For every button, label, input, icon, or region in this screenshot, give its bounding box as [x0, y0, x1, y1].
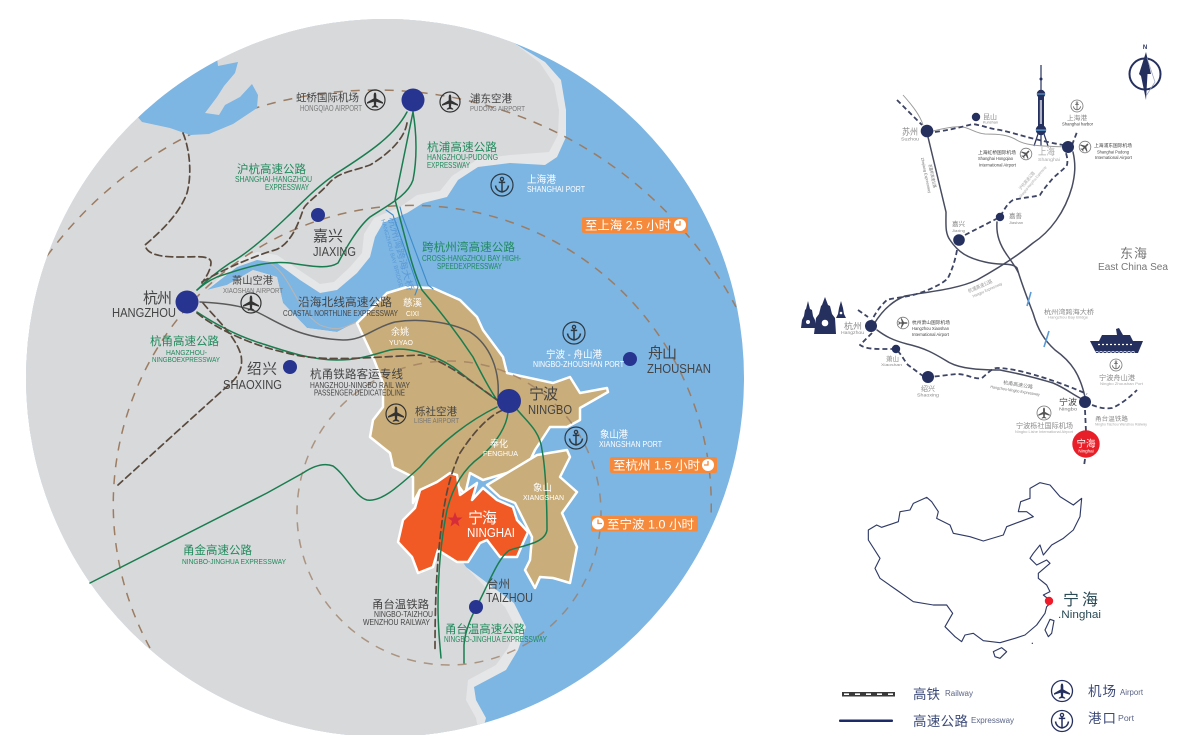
label: Pudong airport: [470, 92, 525, 113]
label: Ningbo: Ningbo: [1059, 406, 1078, 412]
label: Hangzhou-Pudong expressway: [427, 140, 498, 170]
label: Shanghai-Hangzhou expressway: 沪杭高速公路: [1017, 170, 1037, 191]
label: Shanghai-Hangzhou expressway: 沪杭高速公路: [237, 162, 306, 176]
label: Xiaoshan airport: International Airport: [912, 332, 950, 337]
legend: airport: Airport: [1120, 688, 1144, 697]
label: East China Sea: [1098, 246, 1168, 273]
inner distance ring: [297, 361, 601, 665]
icon: ship: [1090, 328, 1143, 353]
label: Shaoxing: Shaoxing: [917, 392, 940, 398]
city node: Ninghai with label: Ninghai: [1078, 448, 1094, 454]
label: Yuyao: [389, 326, 413, 347]
panel: Yangtze delta route map: [801, 45, 1168, 466]
label: Hangzhou Bay Bridge: 杭州湾跨海大桥: [1044, 307, 1095, 316]
label: Shanghai-Hangzhou expressway: Shanghai-Hangzhou Expressway: [1019, 165, 1047, 198]
label: Cixi: [403, 297, 422, 318]
label: Shanghai: [1038, 146, 1060, 162]
label: Jiaxing: JIAXING: [313, 244, 356, 259]
label: Shanghai: Shanghai: [1038, 157, 1060, 162]
label: Xiaoshan airport: Hangzhou Xiaoshan: [912, 326, 950, 331]
label: Ningbo-Taizhou-Wenzhou railway: Ningbo Taizhou Wenzhou Railway: [1095, 422, 1147, 426]
label: Cross-Hangzhou Bay expressway: 跨杭州湾高速公路: [422, 240, 516, 254]
legend: [839, 680, 1144, 732]
distance rings: [47, 90, 736, 648]
label: Lishe airport: [414, 405, 459, 425]
lake: Taihu: [138, 60, 258, 135]
label: Ninghai: [467, 510, 515, 540]
label: Ningbo: 宁波: [529, 386, 558, 403]
label: Xiaoshan airport: 萧山空港: [232, 274, 273, 287]
city node: Jiaxing: [311, 208, 325, 222]
label: Shaoxing: [917, 384, 940, 398]
label: Ninghai: 宁海: [468, 510, 497, 527]
label: Hangzhou: [112, 290, 176, 320]
label: Jiaxing: 嘉兴: [313, 228, 343, 245]
label: Pudong airport: [1094, 142, 1133, 160]
label: Shanghai-Hangzhou expressway: EXPRESSWAY: [265, 183, 310, 192]
icon: Xiaoshan airport: [241, 293, 261, 313]
label: Shaoxing: 绍兴: [921, 384, 935, 393]
label: Hangzhou-Pudong expressway: Hangpu Expressway: [972, 281, 1003, 299]
city node: Hangzhou: [176, 290, 198, 314]
label: Ningbo: [1059, 397, 1078, 412]
label: Lishe airport: LISHE AIRPORT: [414, 416, 459, 425]
label: Hangzhou: HANGZHOU: [112, 305, 176, 320]
label: Hangzhou-Ningbo expressway: 杭甬高速公路: [1003, 379, 1033, 391]
label: Xiangshan port: 象山港: [600, 429, 628, 441]
legend: port: Port: [1118, 714, 1135, 723]
label: Hongqiao airport: 上海虹桥国际机场: [978, 149, 1016, 156]
panel: regional transport map circle: [20, 15, 750, 756]
city node: Shaoxing: [283, 360, 297, 374]
label: Pudong airport: PUDONG AIRPORT: [470, 104, 525, 113]
label: Xiaoshan: Xiaoshan: [881, 362, 902, 367]
label: Ninghai: NINGHAI: [467, 525, 515, 540]
bridge markers: [1027, 292, 1049, 347]
city node: Shaoxing: [922, 371, 934, 383]
route: coastal northline expressway: [200, 302, 498, 397]
label: Jiaxing: [313, 228, 356, 259]
label: Shanghai port: [527, 173, 585, 194]
label: Xiaoshan airport: 杭州萧山国际机场: [912, 319, 950, 326]
label: Kunshan: [983, 112, 998, 124]
icon: Lishe airport: [1037, 406, 1051, 420]
label: Shanghai harbor: 上海港: [1067, 113, 1088, 122]
label: Xiangshan: 象山: [533, 482, 552, 494]
label: Hangzhou-Ningbo passenger railway: [310, 367, 411, 398]
label: Shanghai port: SHANGHAI PORT: [527, 185, 585, 194]
label: Taizhou: TAIZHOU: [486, 591, 533, 605]
label: Jiashan: [1009, 211, 1023, 225]
legend: expressway: 高速公路: [913, 713, 968, 729]
cut-off at the base of the circle: [300, 735, 470, 756]
label: Kunshan: Kunshan: [983, 120, 998, 124]
label: Shanghai-Hangzhou expressway: SHANGHAI-HANGZHOU: [235, 175, 312, 184]
legend: expressway: [839, 713, 1015, 729]
label: Xiaoshan airport: [223, 274, 283, 295]
icon: Xiangshan port: [565, 427, 587, 449]
label: Hangzhou Bay bridge: HANGZHOU BAY BRIDGE: [379, 219, 403, 288]
label: Hangzhou: 杭州: [143, 290, 172, 307]
label: Ninghai on China map: [1058, 591, 1101, 621]
city node: Shanghai: [402, 88, 424, 112]
label: Fenghua: FENGHUA: [483, 449, 518, 458]
label: Ningbo: 宁波: [1059, 397, 1078, 407]
label: Ningbo-Zhoushan port: 宁波舟山港: [1099, 373, 1135, 382]
icon: Hongqiao airport: [365, 90, 385, 110]
label: Taizhou: [486, 577, 533, 605]
icon: north compass: [1130, 45, 1160, 100]
label: Ningbo: [528, 386, 572, 417]
label: Jiashan: Jiashan: [1009, 220, 1023, 225]
label: Ningbo-Taizhou-Wenzhou expressway: 甬台温高速公路: [445, 622, 525, 636]
label: Ningbo-Jinhua expressway: NINGBO-JINGHUA EXPRESSWAY: [182, 557, 286, 566]
time badge: to Shanghai 2.5 hours: [582, 217, 688, 233]
time badge: to Hangzhou 1.5 hours: [610, 457, 717, 473]
label: Hangzhou: Hangzhou: [841, 330, 865, 335]
city node: Ningbo: [497, 389, 521, 413]
label: Suzhou: Suzhou: [901, 136, 920, 142]
label: Hangzhou: 杭州: [844, 321, 862, 331]
icon: Pudong airport: [440, 92, 460, 112]
routes: expressways: [874, 95, 1085, 398]
label: Lishe airport: 栎社空港: [415, 405, 457, 418]
label: Jiaxing: [952, 219, 966, 233]
legend: airport: 机场: [1088, 684, 1116, 699]
label: Ningbo-Taizhou-Wenzhou expressway: NINGBO-JINGHUA EXPRESSWAY: [444, 635, 548, 644]
label: Hangzhou Bay bridge: [379, 216, 416, 294]
label: Hangzhou-Pudong expressway: HANGZHOU-PUDONG: [427, 153, 498, 162]
legend: port: [1052, 710, 1135, 732]
label: Lishe airport: Ningbo Lishe International Airport: [1015, 430, 1074, 434]
label: East China Sea: 东海: [1120, 246, 1147, 261]
label: Jiashan: 嘉善: [1009, 211, 1022, 220]
city node: Taizhou: [469, 600, 483, 614]
label: Zhoushan: [647, 345, 711, 376]
label: Shaoxing: SHAOXING: [223, 377, 282, 392]
time badge: to Hangzhou 1.5 hours: 至杭州 1.5 小时: [613, 458, 700, 472]
label: Lishe airport: 宁波栎社国际机场: [1016, 421, 1073, 430]
label: Taizhou: 台州: [487, 577, 510, 591]
legend: port: 港口: [1088, 711, 1116, 726]
label: Hangzhou Bay Bridge: [1044, 307, 1095, 320]
label: Shanghai: 上海: [1038, 146, 1055, 158]
label: Hangzhou-Pudong expressway: 杭浦高速公路: [967, 278, 994, 295]
label: Kunshan: 昆山: [983, 112, 997, 121]
label: Fenghua: [483, 438, 518, 458]
label: Jiaxing: Jiaxing: [952, 228, 965, 233]
label: Hangzhou-Ningbo expressway: 杭甬高速公路: [150, 334, 219, 348]
label: Shanghai port: 上海港: [527, 173, 556, 186]
label: Shanghai-Hangzhou expressway: [235, 162, 312, 192]
label: Suzhou-Jiaxing expressway: Zhejiang Expressway: [920, 157, 932, 193]
label: Lishe airport: [1015, 421, 1074, 434]
label: Hongqiao airport: International Airport: [979, 162, 1017, 168]
label: Ninghai on China map: .Ninghai: [1058, 609, 1101, 621]
city node: Ninghai with label: [1072, 430, 1100, 458]
label: Cross-Hangzhou Bay expressway: CROSS-HANGZHOU BAY HIGH-: [422, 254, 521, 263]
icon: Ningbo-Zhoushan port: [563, 322, 585, 344]
label: Zhoushan: 舟山: [648, 345, 677, 362]
label: Shanghai harbor: Shanghai harbor: [1062, 122, 1094, 126]
legend: railway: [842, 686, 973, 702]
panel: China locator map: [868, 483, 1101, 658]
icon: north compass: N: [1143, 45, 1147, 51]
label: Hangzhou-Pudong expressway: EXPRESSWAY: [427, 161, 471, 170]
label: Cross-Hangzhou Bay expressway: SPEEDEXPRESSWAY: [437, 262, 503, 271]
label: Hangzhou Bay bridge: 杭州湾跨海大桥: [386, 216, 416, 292]
routes: railways: [118, 123, 503, 650]
label: Hongqiao airport: Shanghai Hongqiao: [978, 156, 1014, 161]
label: Ningbo-Jinhua expressway: 甬金高速公路: [183, 543, 252, 557]
marker: Ninghai on China map: [1045, 597, 1053, 605]
label: Hongqiao airport: 虹桥国际机场: [296, 91, 359, 104]
label: Ninghai on China map: 宁海: [1063, 591, 1098, 609]
label: Pudong airport: Shanghai Pudong: [1097, 150, 1130, 154]
city node: Jiaxing: [953, 234, 965, 246]
icon: Pudong airport: [1078, 140, 1092, 154]
label: Ningbo-Taizhou-Wenzhou railway: [363, 597, 433, 627]
label: Suzhou: [901, 126, 920, 142]
land: Ninghai district highlighted: [398, 473, 528, 573]
icon: Shanghai harbor: [1071, 100, 1083, 112]
city node: Jiashan: [996, 213, 1004, 221]
label: Hangzhou-Ningbo expressway: NINGBOEXPRESSWAY: [152, 355, 220, 364]
city node: Hangzhou: [865, 320, 877, 332]
map base: sea, land and districts: [20, 15, 750, 740]
label: Hongqiao airport: [296, 91, 362, 113]
icon: Ningbo-Zhoushan harbor: [1110, 359, 1122, 371]
legend: expressway: Expressway: [971, 715, 1015, 725]
label: Fenghua: 奉化: [490, 438, 508, 450]
label: Shaoxing: [223, 361, 282, 392]
label: Yuyao: YUYAO: [389, 338, 413, 347]
city node: Ningbo: [1079, 396, 1091, 408]
label: Pudong airport: 上海浦东国际机场: [1094, 142, 1132, 149]
icon: Oriental Pearl Tower: [1034, 65, 1048, 146]
label: Suzhou-Jiaxing expressway: [920, 156, 939, 193]
icon: Shanghai port: [491, 174, 513, 196]
label: Hangzhou-Ningbo passenger railway: PASSENGER DEDICATEDLINE: [314, 388, 405, 398]
icon: pagodas of Hangzhou: [801, 297, 846, 334]
label: Cixi: CIXI: [406, 311, 419, 318]
label: Suzhou-Jiaxing expressway: 苏嘉杭高速公路: [927, 164, 939, 189]
label: Hangzhou-Ningbo passenger railway: HANGZHOU-NINGBO RAIL WAY: [310, 381, 411, 390]
label: Shanghai harbor: [1062, 113, 1094, 126]
label: Cixi: 慈溪: [403, 297, 422, 309]
label: Ningbo-Taizhou-Wenzhou railway: [1095, 415, 1147, 426]
label: Ningbo-Taizhou-Wenzhou expressway: [444, 622, 548, 644]
label: Ningbo-Zhoushan port: [533, 348, 624, 369]
label: Xiaoshan: 萧山: [886, 354, 899, 363]
routes: railways: [858, 100, 1137, 466]
label: Zhoushan: ZHOUSHAN: [647, 361, 711, 376]
label: Ningbo-Zhoushan port: 宁波 - 舟山港: [546, 348, 602, 361]
label: Hangzhou: [841, 321, 865, 335]
legend: railway: 高铁: [913, 686, 940, 702]
label: Coastal northline expressway: COASTAL NORTHLINE EXPRESSWAY: [283, 309, 399, 318]
city node: Suzhou: [921, 125, 933, 137]
star: Ninghai: [448, 512, 462, 526]
label: Ningbo-Taizhou-Wenzhou railway: 甬台温铁路: [372, 597, 429, 611]
legend: railway: Railway: [945, 689, 973, 698]
label: Shanghai-Hangzhou expressway: [1013, 161, 1047, 198]
label: Xiangshan port: XIANGSHAN PORT: [599, 440, 662, 449]
legend: airport: [1052, 680, 1144, 702]
time badge: to Shanghai 2.5 hours: 至上海 2.5 小时: [585, 218, 671, 232]
label: Hangzhou-Ningbo expressway: HANGZHOU-: [166, 348, 207, 357]
label: Cross-Hangzhou Bay expressway: [422, 240, 521, 271]
label: Pudong airport: 浦东空港: [470, 92, 512, 105]
label: Pudong airport: International Airport: [1095, 155, 1133, 160]
label: Hangzhou-Pudong expressway: [967, 275, 1003, 299]
city node: Zhoushan: [623, 352, 637, 366]
label: Ningbo-Zhoushan port: NINGBO-ZHOUSHAN PORT: [533, 360, 624, 369]
label: East China Sea: East China Sea: [1098, 262, 1168, 273]
label: Xiaoshan airport: XIAOSHAN AIRPORT: [223, 286, 283, 295]
label: Ningbo-Taizhou-Wenzhou railway: WENZHOU RAILWAY: [363, 618, 431, 627]
icon: Hongqiao airport: [1019, 147, 1033, 161]
label: Ningbo-Taizhou-Wenzhou railway: NINGBO-TAIZHOU: [374, 610, 433, 619]
label: Suzhou: 苏州: [902, 126, 918, 137]
label: Xiaoshan: [881, 354, 902, 367]
label: Hongqiao airport: [978, 149, 1017, 168]
city node: Xiaoshan: [892, 345, 900, 353]
road along Hangzhou Bay: [267, 262, 357, 329]
label: Hongqiao airport: HONGQIAO AIRPORT: [300, 104, 362, 113]
label: Hangzhou-Ningbo passenger railway: 杭甬铁路客运专线: [310, 367, 404, 381]
label: Yuyao: 余姚: [391, 326, 409, 338]
label: Jiaxing: 嘉兴: [952, 219, 966, 228]
label: Ningbo: NINGBO: [528, 402, 572, 417]
icon: Xiaoshan airport: [897, 317, 909, 329]
label: Ningbo-Zhoushan port: [1099, 373, 1144, 386]
icon: Lishe airport: [386, 404, 406, 424]
label: Coastal northline expressway: 沿海北线高速公路: [298, 295, 393, 309]
label: Shaoxing: 绍兴: [247, 361, 277, 378]
city node: Shanghai: [1062, 141, 1074, 153]
label: Hangzhou-Ningbo expressway: [990, 377, 1041, 397]
label: Hangzhou-Ningbo expressway: Hangzhou-Ningbo Expressway: [990, 384, 1040, 397]
label: Xiangshan: [523, 482, 564, 502]
China outline: [868, 483, 1082, 658]
time badge: to Ningbo 1.0 hour: 至宁波 1.0 小时: [607, 516, 694, 532]
label: Hangzhou Bay Bridge: Hangzhou Bay Bridge: [1048, 316, 1088, 320]
bay bridge lines: [386, 207, 433, 295]
city node: Kunshan: [972, 113, 980, 121]
label: Xiaoshan airport: [912, 319, 950, 337]
land: Xiangshan district: [487, 450, 577, 588]
label: Coastal northline expressway: [283, 295, 399, 318]
label: Ningbo-Zhoushan port: Ningbo Zhoushan Port: [1100, 382, 1144, 386]
label: Hangzhou-Pudong expressway: 杭浦高速公路: [427, 140, 498, 154]
land: Fenghua, Yuyao, Cixi and Ningbo districts: [357, 287, 608, 503]
label: Hangzhou-Ningbo expressway: [150, 334, 220, 364]
label: Xiangshan port: [599, 429, 662, 449]
routes: expressways: [90, 112, 547, 663]
label: Xiangshan: XIANGSHAN: [523, 493, 564, 502]
city node: Ninghai with label: 宁海: [1076, 438, 1096, 450]
label: Ningbo-Jinhua expressway: [182, 543, 286, 566]
label: Ningbo-Taizhou-Wenzhou railway: 甬台温铁路: [1095, 415, 1128, 423]
